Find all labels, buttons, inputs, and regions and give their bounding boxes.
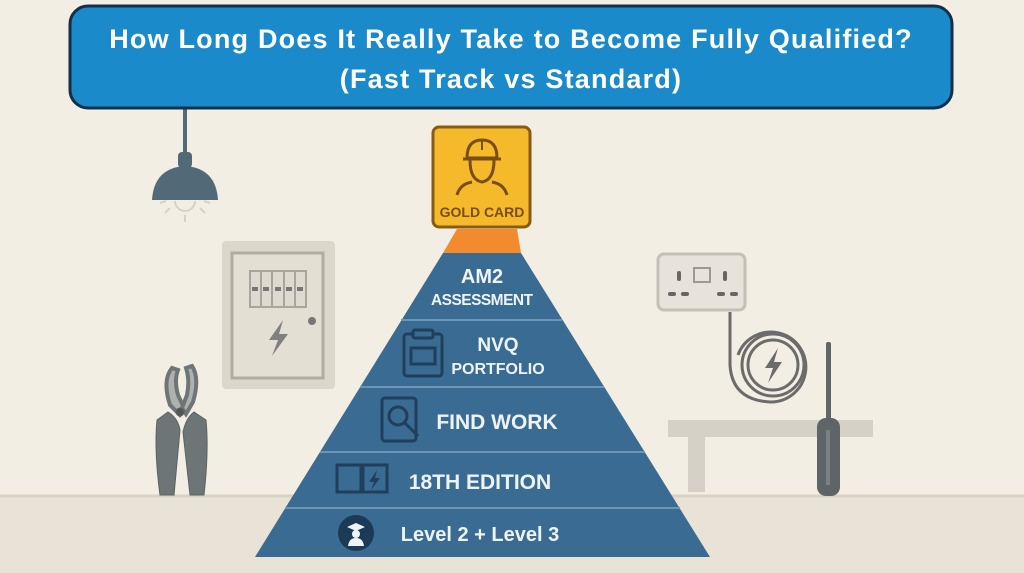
title banner — [70, 6, 952, 108]
tier: AM2 assessment: ASSESSMENT — [431, 292, 534, 309]
pyramid apex (orange) — [443, 229, 521, 253]
tier: AM2 assessment — [431, 266, 534, 309]
title banner: How Long Does It Really Take to Become Fully Qualified? — [109, 24, 913, 54]
tier: find work: FIND WORK — [436, 411, 558, 434]
tier: find work — [382, 398, 558, 441]
tier: NVQ portfolio: PORTFOLIO — [451, 361, 545, 378]
icon: bench — [668, 420, 873, 492]
tier: NVQ portfolio: NVQ — [477, 335, 519, 356]
icon: wall socket with cable — [658, 254, 806, 402]
tier: AM2 assessment: AM2 — [461, 266, 503, 288]
title banner: (Fast Track vs Standard) — [340, 64, 682, 94]
icon: fuse box panel — [222, 241, 335, 389]
icon: screwdriver — [817, 342, 840, 496]
icon: pliers — [156, 366, 207, 495]
gold card badge — [433, 127, 530, 227]
gold card badge: GOLD CARD — [440, 204, 524, 220]
tier: 18th edition — [337, 465, 551, 494]
pyramid — [255, 253, 710, 557]
icon: ceiling lamp — [152, 108, 218, 222]
tier: level 2 + level 3 — [338, 515, 559, 551]
tier: NVQ portfolio — [404, 330, 545, 378]
tier: level 2 + level 3: Level 2 + Level 3 — [401, 524, 559, 546]
tier: 18th edition: 18TH EDITION — [409, 471, 551, 494]
